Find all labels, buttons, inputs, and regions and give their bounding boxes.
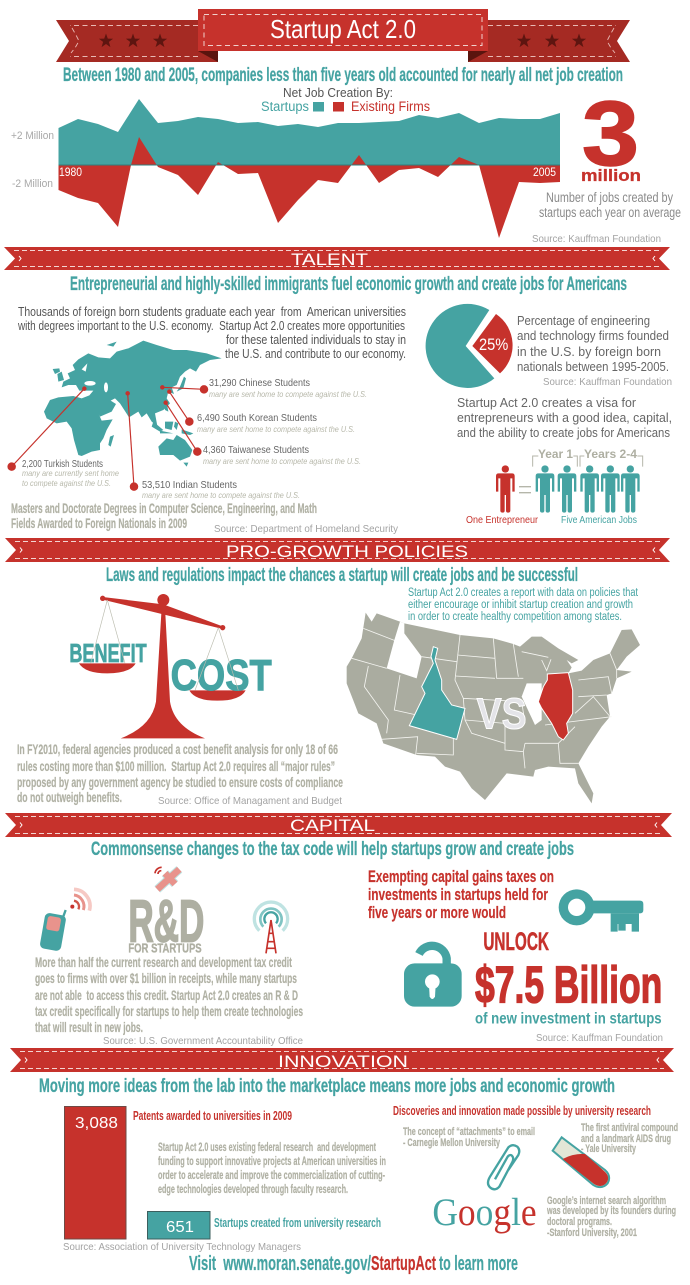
- section banner: pro-growth policies: PRO-GROWTH POLICIES: [226, 543, 468, 561]
- text block: capital gains: Exempting capital gains taxes on: [368, 867, 554, 886]
- text block: antiviral: [581, 1122, 678, 1155]
- graphic: r&d for startups: R&D: [128, 888, 204, 955]
- section banner: capital: CAPITAL: [290, 817, 375, 835]
- text block: entrepreneur visa: [457, 396, 672, 440]
- label: taiwanese students: [203, 444, 361, 466]
- source: omb: Source: Office of Managament and Budget: [158, 795, 342, 807]
- person: job 3: [580, 465, 599, 513]
- text block: cost benefit analysis: rules costing more than $100 million. Startup Act 2.0 requires all “major rules”: [17, 758, 335, 774]
- label: turkish students: 2,200 Turkish Students: [22, 458, 103, 470]
- text block: capital gains: [368, 867, 554, 922]
- label: cost: COST: [171, 651, 272, 700]
- section banner: talent: TALENT: [291, 251, 368, 269]
- us landmass: [347, 613, 640, 803]
- legend: Existing Firms: [351, 99, 430, 114]
- bar: startups: 651: [166, 1219, 194, 1236]
- text block: attachments: The concept of “attachments” to email: [403, 1126, 535, 1138]
- label: taiwanese students: many are sent home to compete against the U.S.: [203, 456, 361, 466]
- equals sign: [519, 487, 531, 493]
- chart title: Net Job Creation By:: [283, 85, 393, 100]
- year brackets: Years 2-4: [584, 447, 637, 461]
- existing firms area: [58, 137, 560, 238]
- label: taiwanese students: 4,360 Taiwanese Students: [203, 444, 309, 456]
- person: job 4: [601, 465, 620, 513]
- text block: foreign born students: for these talented individuals to stay in: [226, 333, 406, 347]
- text block: attachments: [403, 1126, 535, 1149]
- source: gao: Source: U.S. Government Accountability Office: [103, 1035, 303, 1047]
- text block: cost benefit analysis: do not outweigh benefits.: [17, 789, 122, 805]
- person: job 2: [558, 465, 576, 513]
- source: kauffman: Source: Kauffman Foundation: [543, 376, 672, 388]
- label: chinese students: 31,290 Chinese Students: [209, 377, 310, 389]
- text block: foreign born founders: [517, 314, 669, 374]
- callout: 3 million: million: [581, 166, 641, 185]
- person: entrepreneur: [496, 465, 515, 513]
- callout: unlock 7.5 billion: UNLOCK: [483, 928, 549, 956]
- state: idaho: [409, 647, 465, 739]
- pictogram captions: Five American Jobs: [561, 515, 637, 526]
- text block: capital gains: investments in startups held for: [368, 885, 548, 904]
- label: indian students: [142, 479, 300, 500]
- logo: google: Google: [432, 1190, 537, 1234]
- icon: paperclip: [488, 1145, 519, 1189]
- call to action: to learn more: [439, 1253, 518, 1275]
- label: indian students: 53,510 Indian Students: [142, 479, 237, 491]
- axis labels: +2 Million: [11, 130, 54, 142]
- person: job 5: [621, 465, 640, 513]
- text block: foreign born founders: nationals between 1995-2005.: [517, 360, 669, 374]
- text block: r&d tax credit: More than half the current research and development tax credit: [35, 954, 292, 970]
- text block: foreign born founders: in the U.S. by foreign born: [517, 345, 661, 359]
- text block: r&d tax credit: tax credit specifically for startups to help them create technologies: [35, 1003, 303, 1019]
- label: indian students: many are sent home to compete against the U.S.: [142, 490, 300, 500]
- map caption: Fields Awarded to Foreign Nationals in 2009: [11, 515, 187, 531]
- map: united states with idaho vs illinois: [347, 613, 640, 803]
- call to action: Visit www.moran.senate.gov/: [189, 1253, 371, 1275]
- map caption: Masters and Doctorate Degrees in Computer Science, Engineering, and Math: [11, 500, 317, 516]
- state borders: [352, 628, 617, 768]
- icon: key: [559, 889, 643, 932]
- graphic: r&d for startups: [128, 888, 204, 956]
- label: benefit: BENEFIT: [69, 638, 147, 668]
- title banner: [56, 9, 630, 62]
- callout: unlock 7.5 billion: of new investment in startups: [475, 1010, 662, 1027]
- icon: mobile phone: [39, 889, 90, 952]
- text block: google: [546, 1195, 676, 1239]
- icon: test tube: [553, 1137, 609, 1187]
- legend: [261, 99, 430, 114]
- bar: patents: [64, 1106, 292, 1239]
- icon: balance scale with benefit and cost: [69, 594, 272, 738]
- vacated illinois area: [522, 683, 542, 725]
- section banner: pro-growth policies: [5, 538, 670, 562]
- pictogram: one entrepreneur equals five jobs: [466, 447, 643, 526]
- text block: entrepreneur visa: Startup Act 2.0 creates a visa for: [457, 396, 636, 410]
- bar: startups: [148, 1212, 381, 1239]
- map caption: [11, 500, 317, 531]
- bar: patents: Patents awarded to universities in 2009: [133, 1108, 292, 1123]
- icon: open padlock: [404, 946, 462, 1007]
- text block: cost benefit analysis: [17, 741, 343, 805]
- section banner: talent: [4, 247, 670, 270]
- label: turkish students: [22, 458, 119, 488]
- axis labels: -2 Million: [12, 178, 53, 190]
- callout: 3 million: Source: Kauffman Foundation: [532, 233, 661, 245]
- pie chart: 25 percent: [426, 304, 513, 388]
- text block: state report: in order to create healthy competition among states.: [408, 611, 622, 623]
- year labels: 2005: [533, 167, 556, 179]
- year labels: [59, 167, 556, 179]
- year labels: 1980: [59, 167, 82, 179]
- text block: foreign born students: Thousands of foreign born students graduate each year from American universities: [18, 305, 406, 319]
- vs label: VS: [477, 689, 527, 738]
- world map with student counts: [8, 341, 367, 500]
- text block: foreign born students: [17, 305, 406, 361]
- text block: foreign born founders: and technology firms founded: [517, 329, 669, 343]
- text block: state report: either encourage or inhibit startup creation and growth: [408, 599, 633, 611]
- legend: Startups: [261, 99, 309, 114]
- pie chart: 25 percent: 25%: [479, 335, 508, 354]
- text block: foreign born students: with degrees important to the U.S. economy. Startup Act 2.0 creates more opportunities: [17, 319, 405, 333]
- state: illinois: [538, 673, 573, 740]
- bar: patents: 3,088: [75, 1115, 118, 1132]
- text block: antiviral: - Yale University: [581, 1143, 637, 1155]
- chart: net job creation by startups and existing firms: [11, 85, 560, 238]
- text block: entrepreneur visa: entrepreneurs with a good idea, capital,: [457, 411, 672, 425]
- label: south korean students: 6,490 South Korean Students: [197, 412, 317, 424]
- text block: foreign born students: the U.S. and contribute to our economy.: [225, 347, 406, 361]
- text block: google: -Stanford University, 2001: [547, 1227, 637, 1239]
- map landmass: [44, 341, 222, 467]
- text block: foreign born founders: Percentage of engineering: [517, 314, 650, 328]
- text block: state report: Startup Act 2.0 creates a report with data on policies that: [408, 587, 639, 599]
- text block: university research funding: edge technologies developed through faculty research.: [158, 1182, 348, 1196]
- text block: r&d tax credit: goes to firms with over $1 billion in receipts, while many startups: [35, 970, 297, 986]
- source: homeland security: Source: Department of Homeland Security: [214, 523, 399, 535]
- label: south korean students: many are sent home to compete against the U.S.: [197, 424, 355, 434]
- section banner: capital: [5, 813, 672, 837]
- axis labels: [11, 130, 54, 190]
- text block: university research funding: Startup Act 2.0 uses existing federal research and development: [158, 1140, 376, 1154]
- vacated idaho area: [387, 622, 422, 678]
- year brackets: Year 1: [538, 447, 573, 461]
- markers and leader lines: [8, 386, 208, 490]
- graphic: r&d for startups: FOR STARTUPS: [128, 942, 202, 956]
- label: turkish students: to compete against the U.S.: [22, 478, 111, 488]
- label: south korean students: [197, 412, 355, 434]
- callout: 3 million: [532, 83, 681, 245]
- icon: satellite: [155, 867, 179, 889]
- text block: university research funding: [158, 1140, 386, 1196]
- text block: capital gains: five years or more would: [368, 903, 506, 922]
- text block: university research funding: funding to support innovative projects at American universities in: [158, 1154, 386, 1168]
- startups area: [58, 99, 560, 165]
- source: autm: Source: Association of University Technology Managers: [63, 1241, 301, 1253]
- callout: 3 million: 3: [582, 83, 639, 185]
- section banner: innovation: INNOVATION: [278, 1053, 408, 1071]
- text block: google: doctoral programs.: [547, 1216, 612, 1228]
- pictogram captions: [466, 515, 637, 526]
- text block: attachments: - Carnegie Mellon University: [403, 1137, 501, 1149]
- text block: r&d tax credit: [35, 954, 303, 1035]
- section banner: innovation: [10, 1048, 674, 1072]
- call to action: StartupAct: [371, 1253, 436, 1275]
- text block: cost benefit analysis: In FY2010, federal agencies produced a cost benefit analysis for only 18 of 66: [17, 741, 338, 757]
- text block: university research funding: order to accelerate and improve the commercialization of cutting-: [158, 1168, 385, 1182]
- bar: startups: Startups created from university research: [214, 1215, 381, 1230]
- year brackets: [533, 447, 643, 467]
- callout: unlock 7.5 billion: [475, 928, 662, 1027]
- text block: cost benefit analysis: proposed by any government agency be studied to ensure costs of compliance: [17, 774, 343, 790]
- text block: entrepreneur visa: and the ability to create jobs for Americans: [457, 426, 670, 440]
- text block: state report: [408, 587, 639, 623]
- pictogram captions: One Entrepreneur: [466, 515, 539, 526]
- person: job 1: [536, 465, 554, 513]
- text block: r&d tax credit: that will result in new jobs.: [35, 1019, 143, 1035]
- label: chinese students: many are sent home to compete against the U.S.: [209, 389, 367, 399]
- text block: r&d tax credit: are not able to access this credit. Startup Act 2.0 creates an R & D: [35, 987, 298, 1003]
- source: kauffman capital: Source: Kauffman Foundation: [536, 1032, 663, 1044]
- label: turkish students: many are currently sent home: [22, 468, 119, 478]
- icon: broadcast tower: [254, 902, 288, 953]
- stars: [99, 34, 586, 47]
- title text: Startup Act 2.0: [270, 14, 416, 44]
- label: chinese students: [209, 377, 367, 399]
